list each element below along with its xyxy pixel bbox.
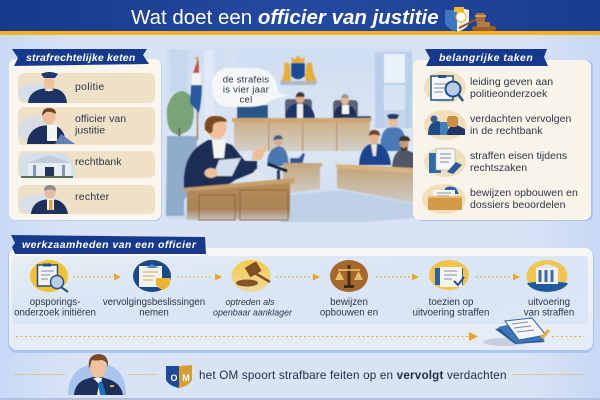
step: toezien op uitvoering straffen: uitvoering straffen — [413, 308, 489, 318]
speech bubble text — [223, 74, 269, 106]
arrow — [376, 274, 419, 280]
row: rechter: rechter — [75, 191, 110, 203]
row: politie: politie — [75, 81, 105, 93]
icon: stack of documents — [483, 318, 550, 346]
figure — [184, 116, 267, 190]
left wall columns — [204, 50, 214, 135]
arrow — [73, 274, 121, 280]
row: officier van justitie: officier van — [75, 113, 126, 125]
step: vervolgingsbeslissingen nemen: nemen — [139, 308, 169, 318]
footer strip — [0, 354, 600, 400]
statement: het OM spoort strafbare feiten op en vervolgt verdachten — [199, 369, 507, 382]
task: verdachten vervolgen in de rechtbank: verdachten vervolgen — [470, 113, 572, 125]
task: verdachten vervolgen in de rechtbank: in de rechtbank — [470, 125, 543, 137]
microphone — [268, 164, 287, 180]
floor — [280, 190, 415, 222]
clerk desk — [283, 163, 322, 193]
heading ribbon: strafrechtelijke keten — [12, 49, 149, 66]
speech bubble text: is vier jaar — [223, 84, 269, 96]
officer standing — [380, 114, 407, 151]
logo: OM shield — [166, 365, 192, 388]
window right — [375, 52, 412, 128]
portrait: officer — [68, 354, 126, 395]
papers on lectern — [248, 169, 272, 181]
arrow — [177, 274, 222, 280]
row: officier van justitie — [18, 107, 155, 145]
row: officier van justitie: justitie — [74, 124, 105, 136]
logo: OM shield: O — [170, 373, 178, 383]
icon: coat of arms — [280, 55, 317, 85]
step: uitvoering van straffen: van straffen — [524, 308, 574, 318]
step: optreden als openbaar aanklager — [213, 260, 293, 318]
tree — [167, 91, 194, 135]
judge right — [333, 94, 371, 118]
task: leiding geven aan politieonderzoek — [424, 71, 553, 103]
icon: Dutch flag — [190, 56, 202, 140]
title: Wat doet een officier van justitie ? — [131, 6, 457, 29]
arrow — [476, 274, 520, 280]
step: optreden als openbaar aanklager: optreden als — [226, 297, 275, 307]
judge center — [285, 92, 315, 118]
step: opsporingsonderzoek initiëren — [14, 260, 96, 318]
task: bewijzen opbouwen en dossiers beoordelen: bewijzen opbouwen en — [470, 187, 578, 199]
step: optreden als openbaar aanklager: openbaar aanklager — [213, 308, 293, 318]
step: toezien op uitvoering straffen — [413, 260, 489, 318]
row: rechtbank — [18, 151, 155, 178]
logo: OM shield: M — [182, 373, 190, 383]
judges bench — [232, 92, 372, 151]
heading ribbon: werkzaamheden van een officier — [11, 235, 206, 254]
clerk in background — [267, 135, 305, 166]
step: uitvoering van straffen: uitvoering — [528, 297, 570, 308]
heading ribbon: belangrijke taken: belangrijke taken — [439, 52, 533, 64]
arrow — [276, 274, 320, 280]
heading ribbon: belangrijke taken — [425, 49, 548, 66]
task: straffen eisen tijdens rechtszaken: straffen eisen tijdens — [470, 150, 567, 162]
step: opsporingsonderzoek initiëren: opsporings- — [30, 297, 80, 308]
prosecutor at lectern — [183, 68, 295, 220]
step: vervolgingsbeslissingen nemen: vervolgingsbeslissingen — [103, 297, 205, 308]
row: rechter — [18, 185, 155, 214]
speech bubble shape — [212, 68, 290, 107]
row: rechtbank: rechtbank — [75, 156, 122, 168]
step: uitvoering van straffen — [524, 260, 574, 318]
task: leiding geven aan politieonderzoek: politieonderzoek — [470, 88, 548, 100]
figure behind speech bubble — [237, 105, 268, 118]
task: straffen eisen tijdens rechtszaken: rechtszaken — [470, 162, 527, 174]
defence desk — [337, 168, 414, 203]
icon: shield and gavel — [445, 7, 496, 32]
row: politie — [18, 72, 155, 103]
person in gray suit — [392, 136, 414, 168]
suspect in blue suit — [359, 130, 391, 165]
inner band — [12, 256, 588, 324]
speech bubble text: cel — [240, 94, 252, 106]
task: bewijzen opbouwen en dossiers beoordelen — [422, 184, 578, 214]
step: bewijzen opbouwen en: bewijzen — [330, 297, 368, 308]
step: toezien op uitvoering straffen: toezien op — [429, 297, 473, 308]
illustration: courtroom — [166, 49, 413, 220]
step: bewijzen opbouwen en: opbouwen en — [320, 308, 378, 318]
speech bubble text: de strafeis — [223, 74, 269, 86]
heading ribbon: strafrechtelijke keten: strafrechtelijke keten — [26, 52, 135, 64]
task: bewijzen opbouwen en dossiers beoordelen: dossiers beoordelen — [470, 199, 566, 211]
header banner — [0, 0, 600, 35]
heading ribbon: werkzaamheden van een officier: werkzaamheden van een officier — [22, 239, 197, 251]
panel: strafrechtelijke keten — [9, 49, 162, 221]
step: bewijzen opbouwen en — [320, 260, 378, 318]
step: opsporingsonderzoek initiëren: onderzoek initiëren — [14, 308, 96, 318]
dotted progress line with arrow — [16, 332, 584, 341]
step: vervolgingsbeslissingen nemen — [103, 260, 205, 318]
task: verdachten vervolgen in de rechtbank — [424, 110, 572, 140]
task: leiding geven aan politieonderzoek: leiding geven aan — [470, 76, 553, 88]
lectern — [183, 178, 295, 220]
defence table with lawyers — [335, 114, 414, 203]
task: straffen eisen tijdens rechtszaken — [424, 147, 567, 177]
panel: werkzaamheden van een officier — [8, 235, 594, 353]
panel: belangrijke taken — [413, 49, 593, 221]
